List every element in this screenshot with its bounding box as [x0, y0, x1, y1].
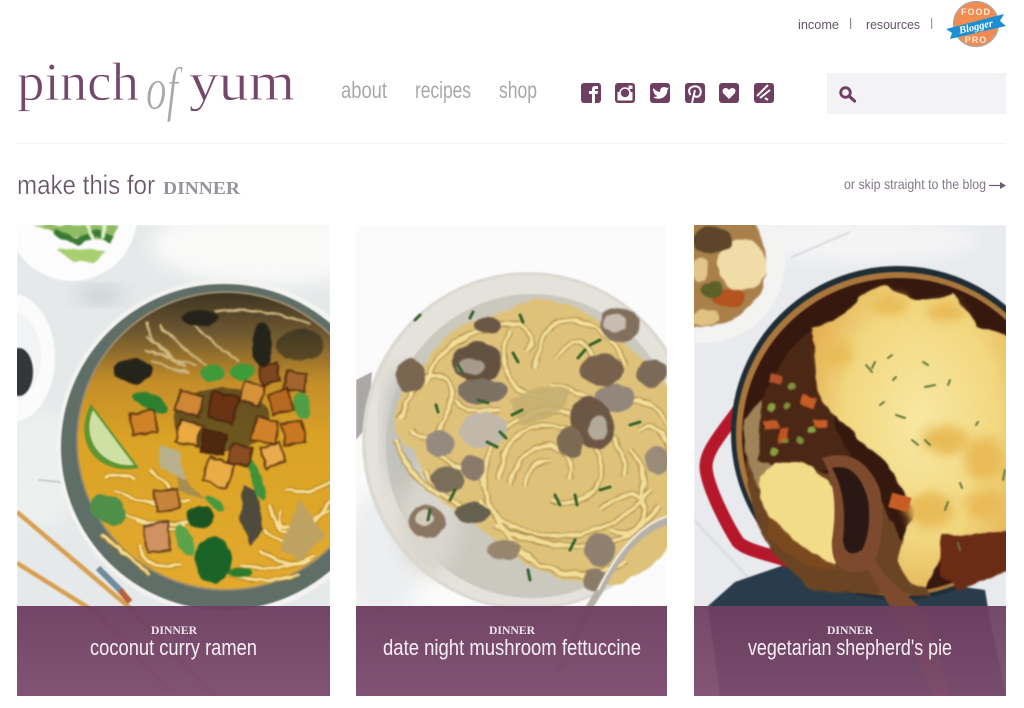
lime wedge [84, 404, 139, 469]
photo: ramen bowl [17, 225, 330, 606]
mashed potato top [812, 285, 1010, 588]
photo: shepherd's pie skillet [694, 225, 1006, 696]
side bowl [694, 225, 784, 342]
panel: date night mushroom fettuccine [356, 271, 667, 696]
caption overlay [356, 606, 667, 696]
pasta mound [395, 299, 680, 585]
caption overlay [17, 606, 330, 696]
social icons [581, 83, 774, 103]
icon: food blogger pro badge: Blogger [957, 18, 995, 37]
main navigation: recipes [415, 77, 471, 103]
top navigation links [798, 17, 932, 32]
heading: make this for dinner: make this for [17, 170, 155, 200]
heading: make this for dinner: DINNER [163, 178, 241, 198]
vegetable filling [758, 320, 860, 470]
photo: fettuccine plate [356, 271, 667, 606]
heading: make this for dinner [17, 170, 241, 200]
main navigation: shop [499, 77, 537, 103]
recipe title: date night mushroom fettuccine [383, 635, 641, 660]
pepper dust [510, 387, 570, 425]
mushrooms [396, 303, 669, 591]
lower noodles [100, 470, 330, 580]
bowl [60, 282, 330, 606]
icon: heart [719, 83, 739, 103]
herbs on mash [866, 355, 1005, 550]
recipe title: coconut curry ramen [90, 635, 257, 660]
category label: DINNER [151, 625, 198, 637]
wooden spoon [822, 455, 950, 696]
side bowl scallions [17, 225, 136, 281]
greens [201, 364, 225, 382]
carrots and peas [769, 373, 783, 384]
side bowl sesame [17, 294, 55, 422]
food [395, 299, 680, 591]
icon: instagram [615, 83, 635, 103]
chopsticks [17, 510, 133, 606]
potato scoop [759, 462, 850, 565]
panel: coconut curry ramen [17, 225, 330, 696]
towel [708, 563, 1006, 696]
link: skip to blog with arrow: or skip straight to the blog [844, 176, 986, 192]
food [743, 285, 1010, 596]
icon: bloglovin [754, 83, 774, 103]
icon: food blogger pro badge: PRO [965, 35, 987, 45]
skillet [731, 266, 1024, 600]
icon: facebook [581, 83, 601, 103]
fork [585, 517, 667, 606]
icon: twitter [650, 83, 670, 103]
icon: food blogger pro badge [946, 2, 1006, 46]
icon: search [841, 88, 854, 101]
top navigation links: income [798, 17, 839, 32]
search box [827, 73, 1006, 114]
pasta strands [396, 320, 670, 576]
parsley [415, 312, 640, 580]
main navigation [341, 77, 537, 103]
golden patches [819, 295, 1005, 528]
main navigation: about [341, 77, 387, 103]
top noodles [145, 310, 310, 372]
mushroom pieces [280, 500, 325, 560]
category label: DINNER [827, 625, 874, 637]
icon: food blogger pro badge: FOOD [961, 7, 991, 17]
red handle [706, 405, 800, 565]
tofu cubes [129, 361, 306, 553]
caption overlay [694, 606, 1006, 696]
logo: pinch of yum: of [146, 56, 183, 122]
food [84, 310, 330, 584]
logo: pinch of yum: yum [189, 52, 295, 112]
dark shadows [114, 310, 324, 452]
icon: pinterest [685, 83, 705, 103]
logo: pinch of yum: pinch [17, 52, 139, 112]
category label: DINNER [489, 625, 536, 637]
logo: pinch of yum [17, 52, 295, 122]
recipe title: vegetarian shepherd's pie [748, 635, 952, 660]
top navigation links: resources [866, 17, 920, 32]
panel: vegetarian shepherd's pie [694, 225, 1006, 696]
plate [362, 272, 694, 610]
